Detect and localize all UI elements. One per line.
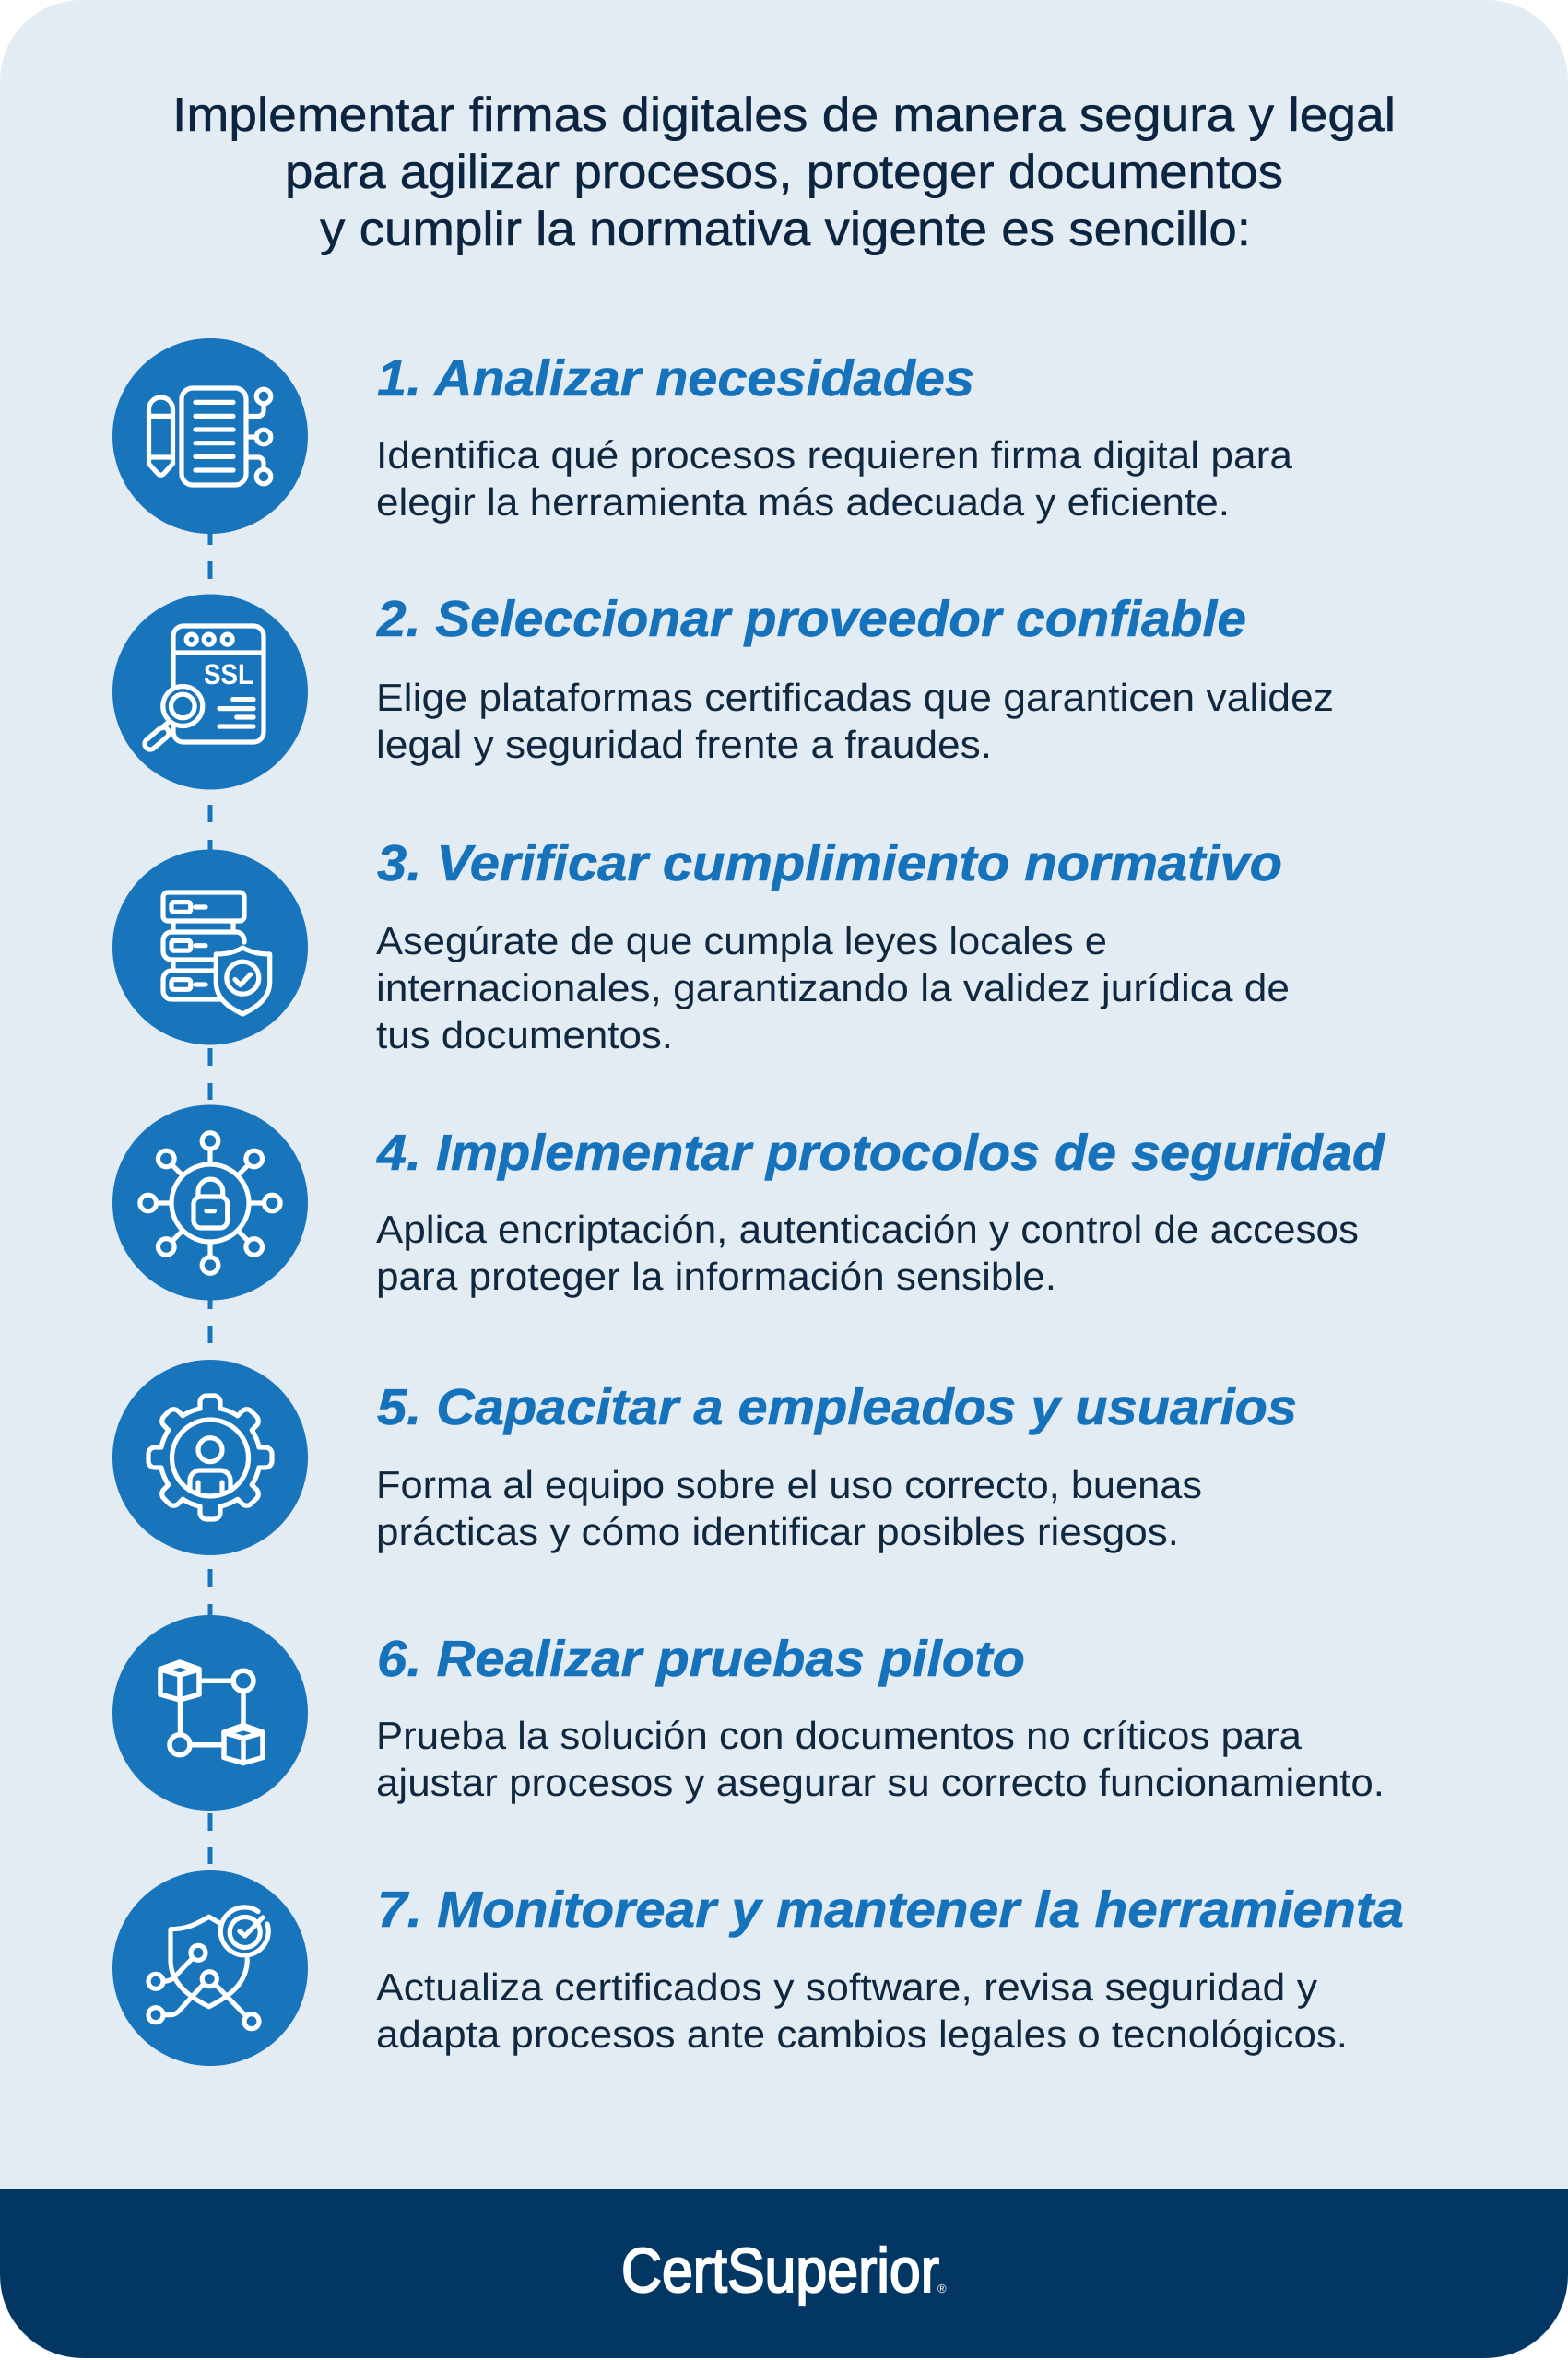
text block: Aplica encriptación, autenticación y control de accesos (376, 1208, 1359, 1251)
icon: gear with person (112, 1360, 308, 1555)
title: para agilizar procesos, proteger documentos (285, 146, 1283, 199)
icon: SSL window with magnifier: SSL (204, 658, 253, 690)
text block: Prueba la solución con documentos no críticos para (376, 1714, 1303, 1757)
heading: 5. Capacitar a empleados y usuarios (377, 1378, 1297, 1435)
icon: lock network (112, 1104, 308, 1300)
heading: 2. Seleccionar proveedor confiable (376, 590, 1246, 647)
icon: shield with target and nodes (112, 1870, 308, 2066)
text block: legal y seguridad frente a fraudes. (376, 723, 992, 766)
title: y cumplir la normativa vigente es sencillo: (320, 203, 1251, 256)
text block: Actualiza certificados y software, revisa seguridad y (376, 1965, 1317, 2009)
text block: Forma al equipo sobre el uso correcto, buenas (376, 1463, 1202, 1506)
step 2 (112, 590, 1334, 789)
text block: Elige plataformas certificadas que garanticen validez (376, 676, 1334, 719)
text block: Identifica qué procesos requieren firma digital para (376, 433, 1293, 477)
heading: 3. Verificar cumplimiento normativo (377, 834, 1282, 891)
text block (376, 1208, 1359, 1298)
text block (376, 919, 1290, 1056)
footer band (0, 2189, 1568, 2358)
dashed connector between steps (208, 533, 212, 1864)
heading: 6. Realizar pruebas piloto (377, 1630, 1025, 1687)
text block: elegir la herramienta más adecuada y eficiente. (376, 480, 1230, 524)
icon: servers with shield (112, 850, 308, 1045)
icon: document with pencil (112, 338, 308, 534)
text block (376, 433, 1293, 524)
text block: prácticas y cómo identificar posibles riesgos. (376, 1510, 1179, 1553)
step 5 (112, 1360, 1297, 1555)
text block: para proteger la información sensible. (376, 1255, 1056, 1298)
step 6 (112, 1615, 1385, 1811)
step 7 (112, 1870, 1404, 2066)
text block (376, 1463, 1202, 1553)
title (172, 88, 1396, 256)
title: Implementar firmas digitales de manera segura y legal (172, 88, 1396, 142)
icon: SSL window with magnifier (112, 594, 308, 789)
text block: adapta procesos ante cambios legales o tecnológicos. (376, 2012, 1348, 2056)
heading: 1. Analizar necesidades (377, 349, 974, 407)
logo: CertSuperior (621, 2236, 939, 2306)
text block (376, 676, 1334, 766)
step 4 (112, 1104, 1385, 1300)
text block: Asegúrate de que cumpla leyes locales e (376, 919, 1107, 962)
text block (376, 1714, 1385, 1804)
logo: ® (937, 2282, 947, 2295)
heading: 7. Monitorear y mantener la herramienta (377, 1881, 1404, 1938)
text block (376, 1965, 1348, 2056)
text block: internacionales, garantizando la validez jurídica de (376, 966, 1290, 1009)
step 3 (112, 834, 1290, 1056)
heading: 4. Implementar protocolos de seguridad (376, 1124, 1385, 1181)
text block: ajustar procesos y asegurar su correcto funcionamiento. (376, 1761, 1385, 1804)
icon: connected cubes (112, 1615, 308, 1811)
step 1 (112, 338, 1293, 534)
text block: tus documentos. (376, 1013, 673, 1056)
